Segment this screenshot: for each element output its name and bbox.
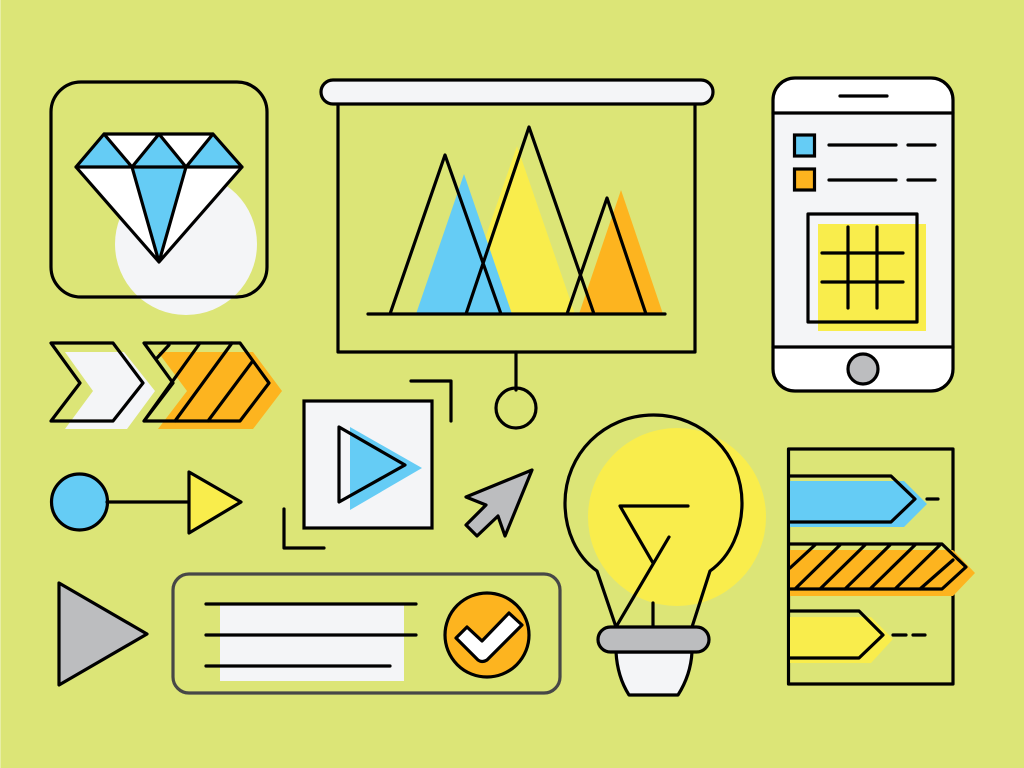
yellow grid card	[808, 214, 926, 331]
icon: white chevron arrow	[51, 343, 155, 429]
icon: smartphone	[773, 78, 953, 391]
icon: light bulb	[565, 415, 766, 695]
icon: circle linked to yellow triangle	[52, 472, 241, 533]
projector screen with mountain chart	[321, 80, 713, 428]
bar: orange striped	[790, 544, 975, 596]
icon: cursor arrow	[466, 470, 532, 536]
icon: striped orange chevron arrow	[144, 343, 282, 429]
panel: horizontal arrow bar chart	[788, 449, 975, 684]
checklist rows	[794, 135, 935, 190]
icon: grey play triangle	[59, 583, 147, 685]
icon: play button in frame	[284, 381, 451, 548]
bar: yellow	[790, 611, 925, 663]
icon: check badge	[445, 593, 529, 677]
bar: blue	[790, 476, 938, 527]
icon: diamond in rounded frame	[51, 82, 267, 315]
chart: overlapping triangles	[368, 127, 665, 314]
panel: checklist card	[173, 574, 560, 693]
